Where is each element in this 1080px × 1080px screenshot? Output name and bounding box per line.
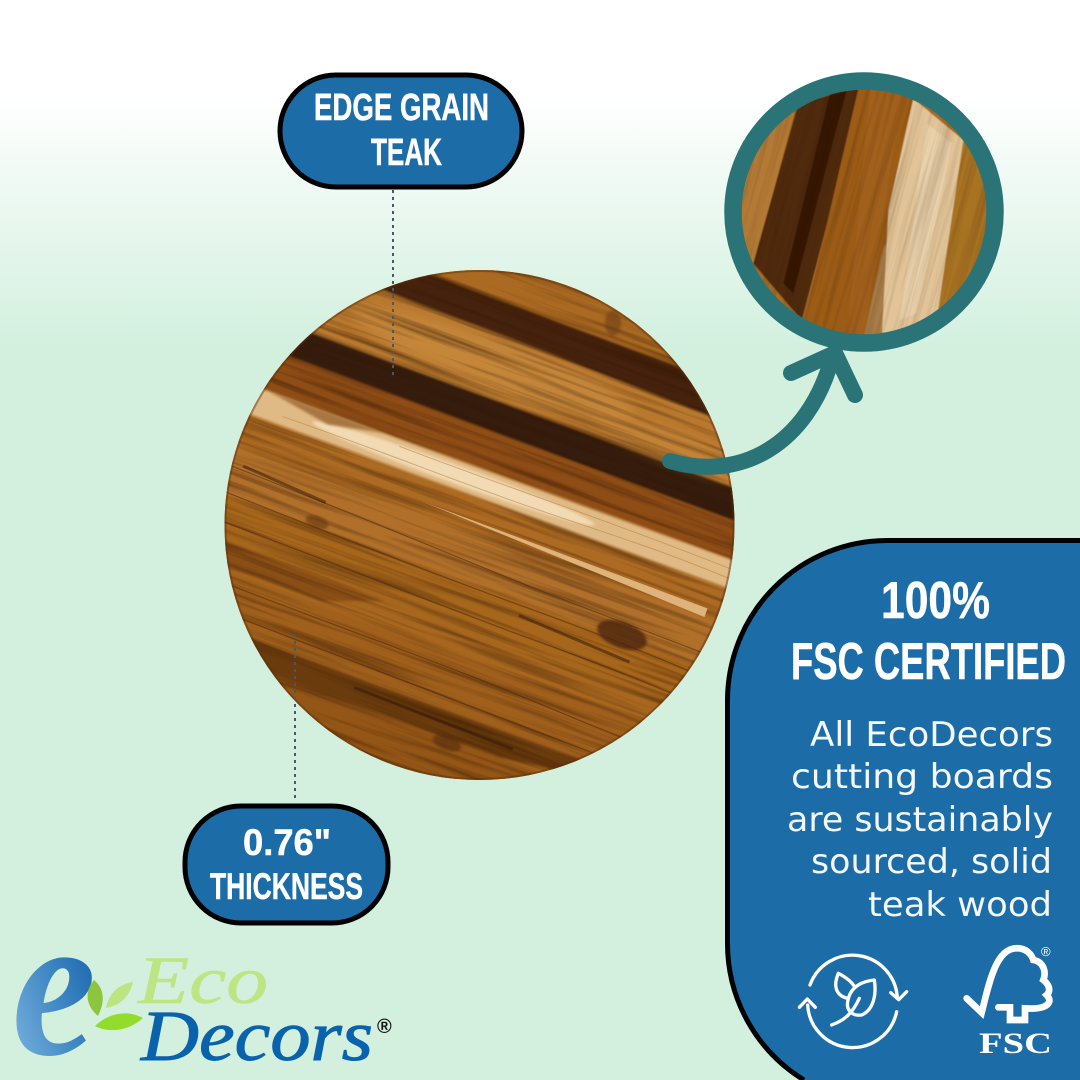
arrow to magnified detail	[670, 353, 855, 467]
callout: thickness	[185, 806, 388, 923]
callout: edge grain teak	[280, 75, 522, 187]
callout: edge grain teak: TEAK	[371, 132, 442, 174]
logo word Eco: Eco	[137, 942, 268, 1018]
dotted leader: edge grain	[392, 190, 394, 379]
light sapwood stripe	[250, 388, 732, 617]
logo leaves	[88, 980, 143, 1030]
icon: FSC logo: FSC	[979, 1027, 1052, 1060]
logo word Decors: Decors	[140, 996, 373, 1076]
panel body text: All EcoDecors	[810, 715, 1053, 755]
icon: recycling leaf	[799, 955, 907, 1048]
panel body text: teak wood	[868, 885, 1052, 925]
panel heading	[791, 572, 1066, 691]
panel: FSC certified	[727, 540, 1080, 1080]
panel body text: cutting boards	[791, 757, 1053, 797]
panel heading: 100%	[881, 572, 990, 630]
wood knots	[304, 310, 651, 755]
magnified wood detail	[724, 72, 1004, 352]
panel body text: are sustainably	[787, 800, 1053, 840]
lens grain	[742, 90, 986, 334]
dotted leader: thickness	[294, 634, 296, 802]
logo registered mark: ®	[377, 1016, 392, 1038]
icon: FSC logo: ®	[1041, 944, 1051, 959]
callout: thickness: THICKNESS	[210, 866, 363, 907]
callout: edge grain teak: EDGE GRAIN	[314, 87, 489, 129]
icon: FSC logo	[967, 944, 1052, 1060]
logo: EcoDecors	[12, 872, 392, 1080]
panel body text: sourced, solid	[811, 842, 1052, 882]
wood grain texture	[224, 270, 734, 780]
panel body text	[787, 715, 1053, 925]
wood cutting board	[224, 270, 734, 780]
lens ring	[733, 81, 995, 343]
callout: thickness: 0.76"	[243, 822, 331, 863]
